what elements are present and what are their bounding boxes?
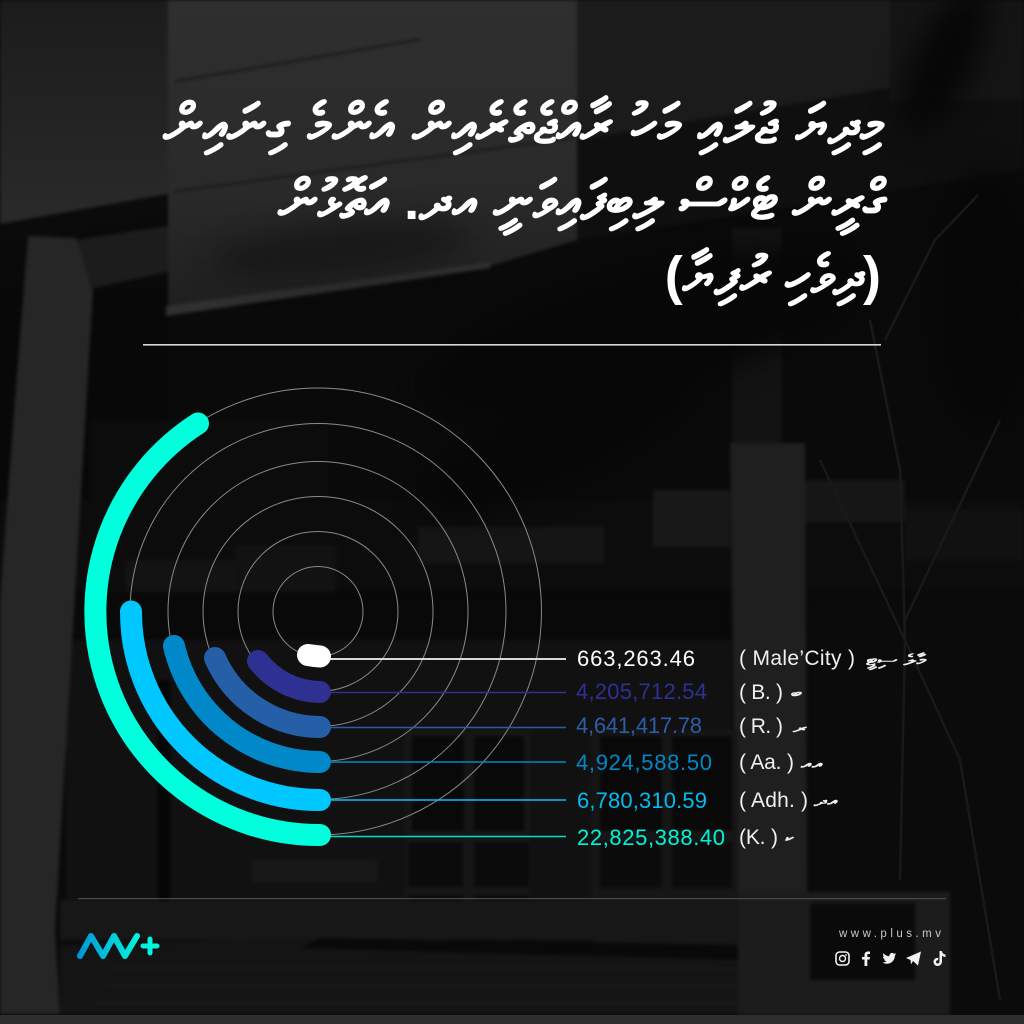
arc: R.: [215, 658, 320, 727]
arc: K.: [95, 424, 320, 835]
values: 663,263.46: [577, 646, 695, 671]
icon: twitter: [882, 953, 896, 964]
region labels: ( Male’City ): [739, 647, 855, 670]
region labels in Dhivehi: މާލެ ސިޓީ: [866, 651, 927, 670]
values: [576, 646, 725, 850]
icon: facebook: [862, 952, 870, 966]
icon: telegram: [906, 952, 921, 966]
arc: Adh.: [131, 612, 320, 800]
region labels: ( Adh. ): [739, 789, 808, 812]
title: ގްރީން ޓެކްސް ލިބިފައިވަނީ އދ. އަތޮޅުން: [278, 169, 885, 231]
social icons: [836, 951, 946, 966]
title: (ދިވެހި ރުފިޔާ): [665, 246, 881, 306]
title: މިދިޔަ ޖުލައި މަހު ރާއްޖެތެރެއިން އެންމެ ގިނައިން: [163, 93, 885, 155]
logo: [80, 936, 157, 956]
region labels in Dhivehi: އދ: [813, 793, 838, 810]
region labels in Dhivehi: ރ: [791, 720, 807, 737]
arc: Male City: [308, 655, 320, 656]
region labels: ( B. ): [739, 681, 783, 704]
bottom band: [0, 1015, 1024, 1024]
region labels: [739, 647, 855, 849]
values: 22,825,388.40: [577, 825, 725, 850]
values: 4,924,588.50: [576, 750, 712, 775]
region labels: ( Aa. ): [739, 751, 794, 774]
region labels in Dhivehi: [785, 651, 927, 847]
values: 4,205,712.54: [576, 679, 707, 704]
region labels: (K. ): [739, 826, 778, 849]
icon: tiktok: [934, 951, 946, 966]
values: 6,780,310.59: [577, 788, 707, 813]
region labels: ( R. ): [739, 715, 783, 738]
values: 4,641,417.78: [576, 713, 702, 738]
footer divider: [78, 898, 946, 899]
icon: instagram: [836, 952, 849, 965]
radial bar chart: [94, 388, 566, 836]
arc: Aa.: [174, 646, 320, 762]
region labels in Dhivehi: ކ: [785, 830, 795, 847]
region labels in Dhivehi: ބ: [791, 685, 803, 702]
arc: B.: [258, 661, 320, 692]
title: [162, 93, 888, 306]
leader lines: [325, 659, 566, 836]
region labels in Dhivehi: އއ: [799, 756, 823, 773]
website url: www.plus.mv: [838, 928, 941, 940]
